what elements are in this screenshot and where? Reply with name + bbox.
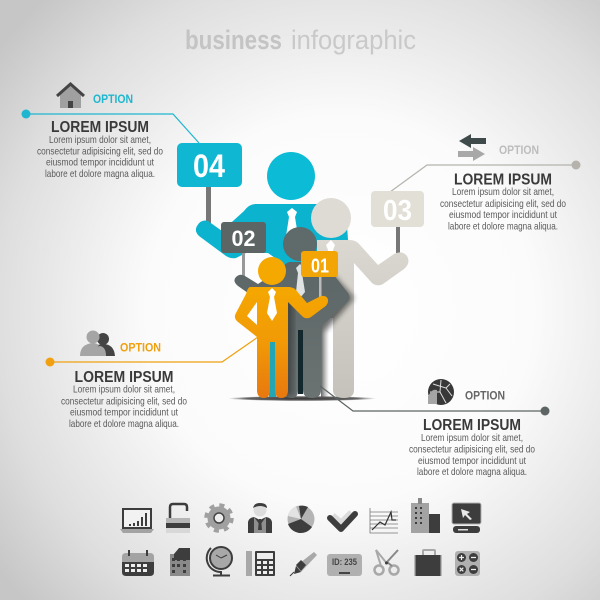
panel: left option: LOREM IPSUM bbox=[74, 369, 174, 386]
sign 03 bbox=[371, 191, 424, 227]
sign 04 bbox=[177, 143, 242, 226]
panel: top left option: OPTION bbox=[93, 92, 133, 106]
connector: orange bbox=[46, 337, 258, 366]
panel: bottom right option: eiusmod tempor incididunt ut bbox=[418, 455, 526, 467]
panel: top right option bbox=[440, 134, 566, 232]
icon: globe clock bbox=[207, 547, 232, 576]
panel: top left option: labore et dolore magna aliqua. bbox=[45, 168, 155, 180]
connector: gray bbox=[320, 386, 550, 416]
sign 01 bbox=[301, 251, 338, 278]
panel: top left option: eiusmod tempor incididunt ut bbox=[46, 156, 154, 168]
sign 01: 01 bbox=[311, 256, 329, 278]
panel: top right option: labore et dolore magna aliqua. bbox=[448, 220, 558, 232]
icon: arrows bbox=[458, 134, 486, 161]
icon: people bbox=[80, 330, 115, 356]
icon: office building bbox=[170, 548, 190, 576]
title: business bbox=[185, 25, 282, 55]
panel: bottom right option: consectetur adipisicing elit, sed do bbox=[409, 444, 535, 456]
panel: bottom right option: labore et dolore magna aliqua. bbox=[417, 466, 527, 478]
icon: pen bbox=[290, 552, 317, 576]
icon: line chart bbox=[370, 508, 398, 533]
icon: buildings bbox=[411, 498, 440, 533]
icon: monitor with cursor bbox=[452, 503, 481, 533]
sign 04: 04 bbox=[193, 148, 225, 184]
ground shadow bbox=[228, 396, 376, 401]
panel: left option: Lorem ipsum dolor sit amet, bbox=[73, 384, 175, 396]
icon: scissors bbox=[374, 550, 398, 574]
panel: bottom right option: LOREM IPSUM bbox=[423, 417, 521, 434]
panel: top right option: Lorem ipsum dolor sit amet, bbox=[452, 186, 554, 198]
icon: ID card: ID: 235 bbox=[332, 557, 357, 567]
icon: ID card bbox=[327, 554, 362, 576]
panel: bottom right option: OPTION bbox=[465, 388, 505, 402]
title bbox=[185, 25, 416, 55]
gray figure bbox=[234, 227, 354, 398]
sign 02 and pole bbox=[221, 222, 266, 280]
panel: left option: consectetur adipisicing elit, sed do bbox=[61, 396, 187, 408]
panel: left option: eiusmod tempor incididunt ut bbox=[70, 406, 178, 418]
panel: top left option: LOREM IPSUM bbox=[51, 119, 149, 136]
icon: pie chart bbox=[288, 506, 314, 533]
panel: top left option: Lorem ipsum dolor sit amet, bbox=[49, 134, 151, 146]
panel: top right option: LOREM IPSUM bbox=[454, 172, 552, 188]
connector: blue bbox=[22, 110, 199, 143]
icon: calculator signs bbox=[455, 551, 480, 576]
icon: check mark bbox=[330, 512, 355, 529]
sign 03: 03 bbox=[383, 195, 412, 227]
panel: top left option bbox=[37, 84, 163, 180]
icon: briefcase bbox=[414, 550, 442, 576]
icon: house bbox=[57, 84, 84, 108]
panel: top right option: eiusmod tempor incididunt ut bbox=[449, 209, 557, 221]
people group bbox=[177, 143, 424, 401]
icon: laptop chart bbox=[120, 508, 154, 533]
panel: left option bbox=[61, 330, 187, 430]
beige figure bbox=[311, 198, 408, 398]
icon: open lock bbox=[166, 504, 190, 533]
sign 02 and pole: 02 bbox=[232, 226, 256, 251]
panel: left option: OPTION bbox=[120, 340, 161, 354]
icon: head with network bbox=[428, 379, 454, 405]
orange figure bbox=[235, 257, 328, 398]
blue figure bbox=[196, 152, 348, 265]
icon row 2 bbox=[122, 547, 480, 576]
panel: left option: labore et dolore magna aliqua. bbox=[69, 418, 179, 430]
cast shadow bbox=[320, 262, 354, 330]
icon: calendar bbox=[122, 550, 154, 576]
panel: top left option: consectetur adipisicing elit, sed do bbox=[37, 146, 163, 158]
icon: calculator bbox=[246, 551, 275, 576]
connector: beige bbox=[390, 160, 580, 192]
icon: businessman bbox=[248, 503, 272, 533]
icon: gear bbox=[206, 505, 232, 531]
panel: top right option: OPTION bbox=[499, 143, 539, 157]
panel: top right option: consectetur adipisicing elit, sed do bbox=[440, 198, 566, 210]
panel: bottom right option: Lorem ipsum dolor sit amet, bbox=[421, 432, 523, 444]
icon row 1 bbox=[120, 498, 481, 533]
panel: bottom right option bbox=[409, 379, 535, 478]
title: infographic bbox=[291, 25, 416, 55]
